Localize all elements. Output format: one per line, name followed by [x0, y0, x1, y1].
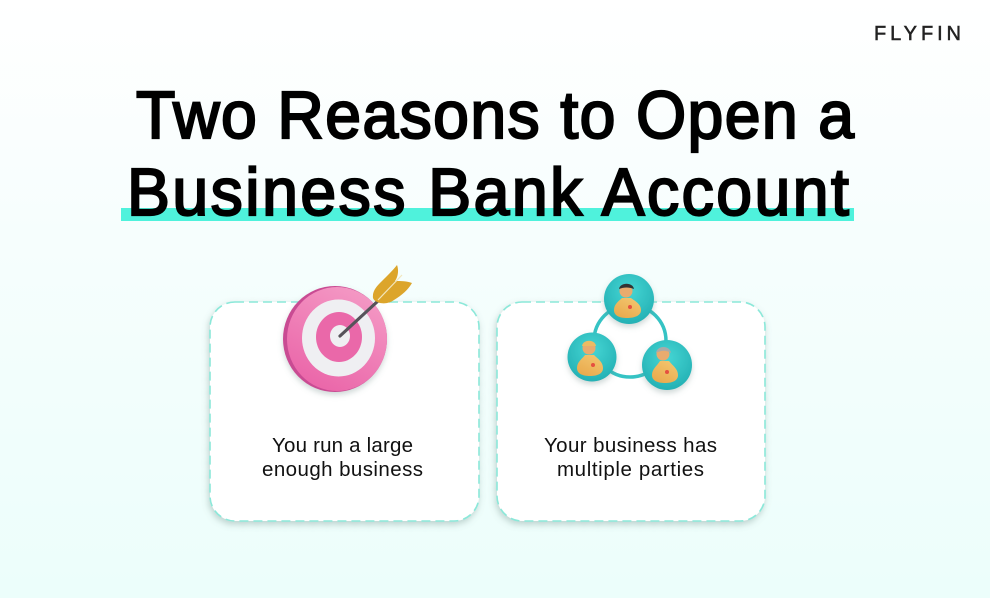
title highlight underline [121, 208, 854, 221]
card background [497, 302, 765, 521]
person top [604, 274, 654, 324]
title line 2: Business Bank Account [127, 155, 849, 229]
card text: Your business has [544, 434, 717, 457]
card background [210, 302, 479, 521]
panel: multiple parties [497, 274, 765, 521]
card text: multiple parties [557, 458, 704, 481]
title line 1: Two Reasons to Open a [136, 78, 855, 152]
card text [262, 434, 423, 481]
title [121, 78, 855, 229]
card text [544, 434, 717, 481]
icon: target with arrow [283, 265, 412, 392]
card text: enough business [262, 458, 423, 481]
card text: You run a large [272, 434, 413, 457]
person left [568, 332, 616, 382]
person right [642, 340, 692, 390]
logo: FLYFIN: FLYFIN [874, 23, 961, 45]
panel: large enough business [210, 265, 479, 521]
icon: three connected people [568, 274, 692, 390]
